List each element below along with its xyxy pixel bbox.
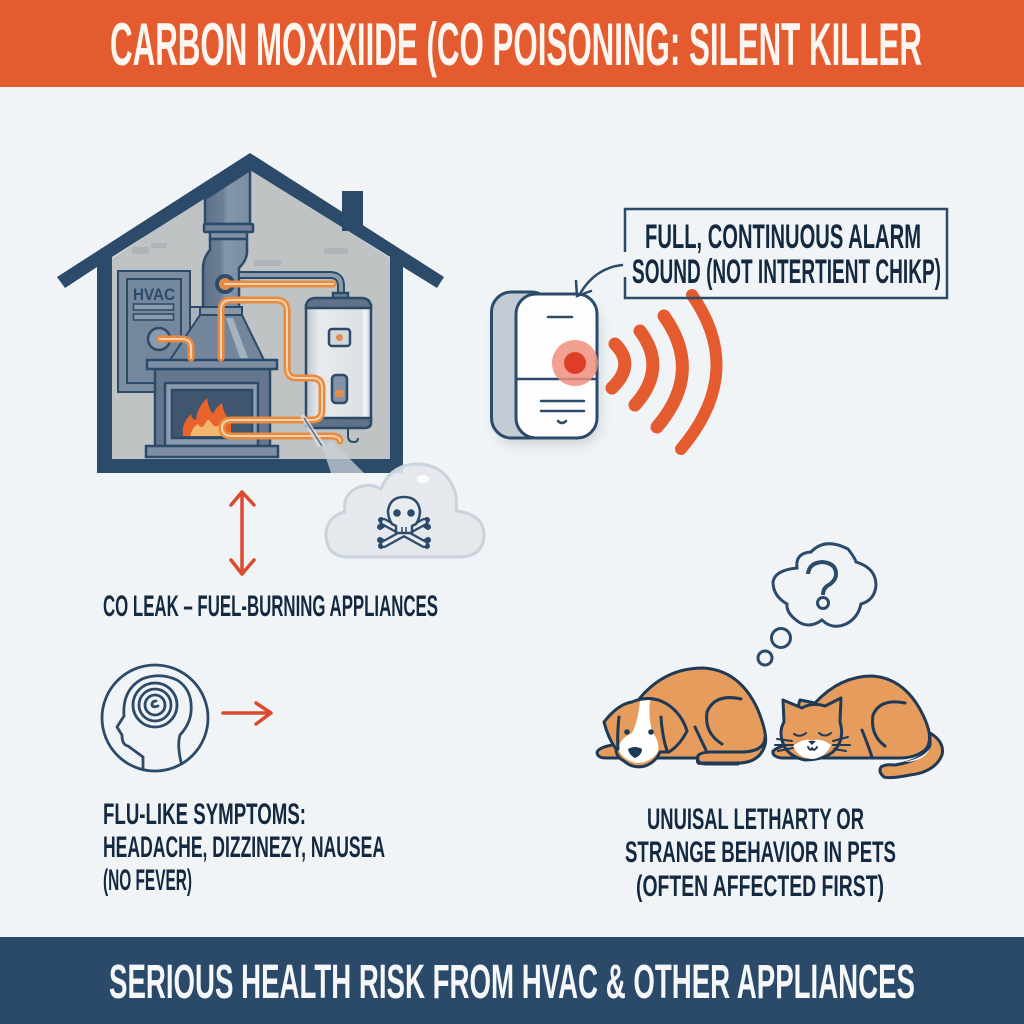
dog face lines: [618, 717, 667, 751]
hood: [170, 307, 264, 360]
red light: [552, 340, 598, 386]
symptoms text: [103, 798, 385, 897]
cat head: [781, 698, 842, 760]
dog muzzle blaze: [618, 700, 658, 763]
cat face lines: [775, 733, 850, 751]
red right arrow: [223, 703, 271, 724]
water heater: [306, 293, 371, 442]
dog: [597, 668, 766, 767]
header banner: [0, 0, 1024, 87]
double-headed red arrow: [231, 492, 254, 574]
callout box: [625, 209, 947, 298]
dizziness head icon: [102, 665, 208, 771]
gray water heater pipe: [240, 275, 341, 293]
cat leg lines: [862, 702, 905, 757]
symptoms text: FLU-LIKE SYMPTOMS:: [103, 798, 306, 831]
dog head: [604, 698, 687, 767]
alarm callout: [576, 209, 947, 298]
alarm back: [492, 292, 552, 438]
cat tail white stripe: [905, 748, 930, 762]
house illustration: [57, 153, 444, 473]
alarm details: [517, 317, 596, 423]
flue duct: [203, 170, 253, 308]
highlight: [417, 475, 429, 483]
cat tail: [880, 733, 942, 778]
thought bubble: [758, 544, 876, 665]
alarm front: [516, 294, 597, 438]
fireplace: [146, 360, 278, 457]
cat body: [773, 676, 930, 758]
wall bricks: [132, 243, 348, 266]
dog leg lines: [695, 698, 765, 764]
HVAC unit: [118, 271, 190, 392]
CO leak label: CO LEAK – FUEL-BURNING APPLIANCES: [103, 590, 438, 623]
house walls and roof: [57, 153, 444, 473]
sound waves: [612, 295, 717, 449]
cat nose: [808, 741, 816, 745]
pets text: [625, 803, 896, 903]
cat: [773, 676, 942, 778]
HVAC unit: HVAC: [133, 285, 175, 304]
pets text: UNUISAL LETHARTY OR: [647, 803, 864, 836]
CO alarm device: [492, 292, 600, 445]
dog body: [640, 668, 766, 763]
orange pipes: [160, 274, 340, 441]
skull: [388, 497, 420, 533]
CO cloud with skull: [326, 464, 484, 557]
callout text: [632, 218, 941, 291]
alarm shadow: [495, 305, 600, 445]
crossbones: [380, 520, 428, 546]
gas leak spray: [300, 414, 364, 473]
dog left paw: [597, 745, 630, 758]
dog eyes and nose: [624, 729, 654, 758]
flames: [183, 398, 231, 436]
callout arrow: [576, 265, 622, 296]
symptoms text: HEADACHE, DIZZINEZY, NAUSEA: [103, 831, 385, 864]
pets text: (OFTEN AFFECTED FIRST): [636, 870, 884, 903]
cat muzzle: [793, 740, 831, 759]
house interior wall: [112, 168, 390, 460]
cloud: [326, 464, 484, 557]
footer banner: [0, 937, 1024, 1024]
symptoms text: (NO FEVER): [103, 864, 192, 897]
